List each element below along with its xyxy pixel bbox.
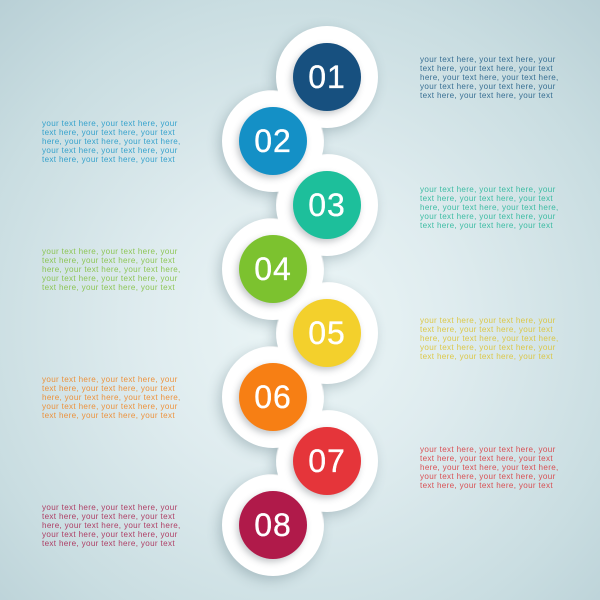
white disc 06 [222, 346, 324, 448]
text block 05 [420, 316, 559, 361]
white disc 03 [276, 154, 378, 256]
white disc 08 [222, 474, 324, 576]
text block 04: your text here, your text here, your [42, 274, 178, 283]
text block 08: here, your text here, your text here, [42, 521, 181, 530]
text block 01: your text here, your text here, your [420, 55, 556, 64]
text block 08 [42, 503, 181, 548]
text block 02: text here, your text here, your text [42, 128, 175, 137]
text block 06: text here, your text here, your text [42, 411, 175, 420]
text block 03: here, your text here, your text here, [420, 203, 559, 212]
text block 06: here, your text here, your text here, [42, 393, 181, 402]
text block 04: your text here, your text here, your [42, 247, 178, 256]
text block 01: text here, your text here, your text [420, 64, 553, 73]
text block 06: your text here, your text here, your [42, 375, 178, 384]
text block 05: your text here, your text here, your [420, 343, 556, 352]
step 04 badge: 04 [254, 251, 292, 287]
text block 06: text here, your text here, your text [42, 384, 175, 393]
text block 05: here, your text here, your text here, [420, 334, 559, 343]
step 03 badge [293, 171, 361, 239]
step 08 badge: 08 [254, 507, 292, 543]
white disc 05 [276, 282, 378, 384]
step 01 badge: 01 [308, 59, 346, 95]
white disc 02 [222, 90, 324, 192]
step 06 badge: 06 [254, 379, 292, 415]
text block 07: text here, your text here, your text [420, 481, 553, 490]
text block 02 [42, 119, 181, 164]
text block 07: here, your text here, your text here, [420, 463, 559, 472]
text block 05: text here, your text here, your text [420, 325, 553, 334]
text block 06: your text here, your text here, your [42, 402, 178, 411]
text block 07 [420, 445, 559, 490]
text block 03: text here, your text here, your text [420, 194, 553, 203]
text block 01: text here, your text here, your text [420, 91, 553, 100]
text block 03: your text here, your text here, your [420, 185, 556, 194]
text block 03 [420, 185, 559, 230]
text block 01 [420, 55, 559, 100]
step 06 badge [239, 363, 307, 431]
text block 08: text here, your text here, your text [42, 539, 175, 548]
white disc 04 [222, 218, 324, 320]
step 02 badge: 02 [254, 123, 292, 159]
text block 04: text here, your text here, your text [42, 256, 175, 265]
white disc 07 [276, 410, 378, 512]
text block 04: here, your text here, your text here, [42, 265, 181, 274]
text block 02: your text here, your text here, your [42, 146, 178, 155]
step 07 badge: 07 [308, 443, 346, 479]
step 05 badge [293, 299, 361, 367]
text block 04: text here, your text here, your text [42, 283, 175, 292]
step 05 badge: 05 [308, 315, 346, 351]
text block 08: text here, your text here, your text [42, 512, 175, 521]
text block 02: your text here, your text here, your [42, 119, 178, 128]
step 02 badge [239, 107, 307, 175]
text block 06 [42, 375, 181, 420]
text block 03: your text here, your text here, your [420, 212, 556, 221]
white disc 01 [276, 26, 378, 128]
step 08 badge [239, 491, 307, 559]
text block 07: your text here, your text here, your [420, 472, 556, 481]
text block 05: text here, your text here, your text [420, 352, 553, 361]
text block 01: here, your text here, your text here, [420, 73, 559, 82]
step 03 badge: 03 [308, 187, 346, 223]
step 07 badge [293, 427, 361, 495]
text block 02: here, your text here, your text here, [42, 137, 181, 146]
text block 07: text here, your text here, your text [420, 454, 553, 463]
step 01 badge [293, 43, 361, 111]
text block 04 [42, 247, 181, 292]
text block 07: your text here, your text here, your [420, 445, 556, 454]
text block 03: text here, your text here, your text [420, 221, 553, 230]
text block 01: your text here, your text here, your [420, 82, 556, 91]
text block 08: your text here, your text here, your [42, 503, 178, 512]
text block 08: your text here, your text here, your [42, 530, 178, 539]
text block 05: your text here, your text here, your [420, 316, 556, 325]
step 04 badge [239, 235, 307, 303]
text block 02: text here, your text here, your text [42, 155, 175, 164]
